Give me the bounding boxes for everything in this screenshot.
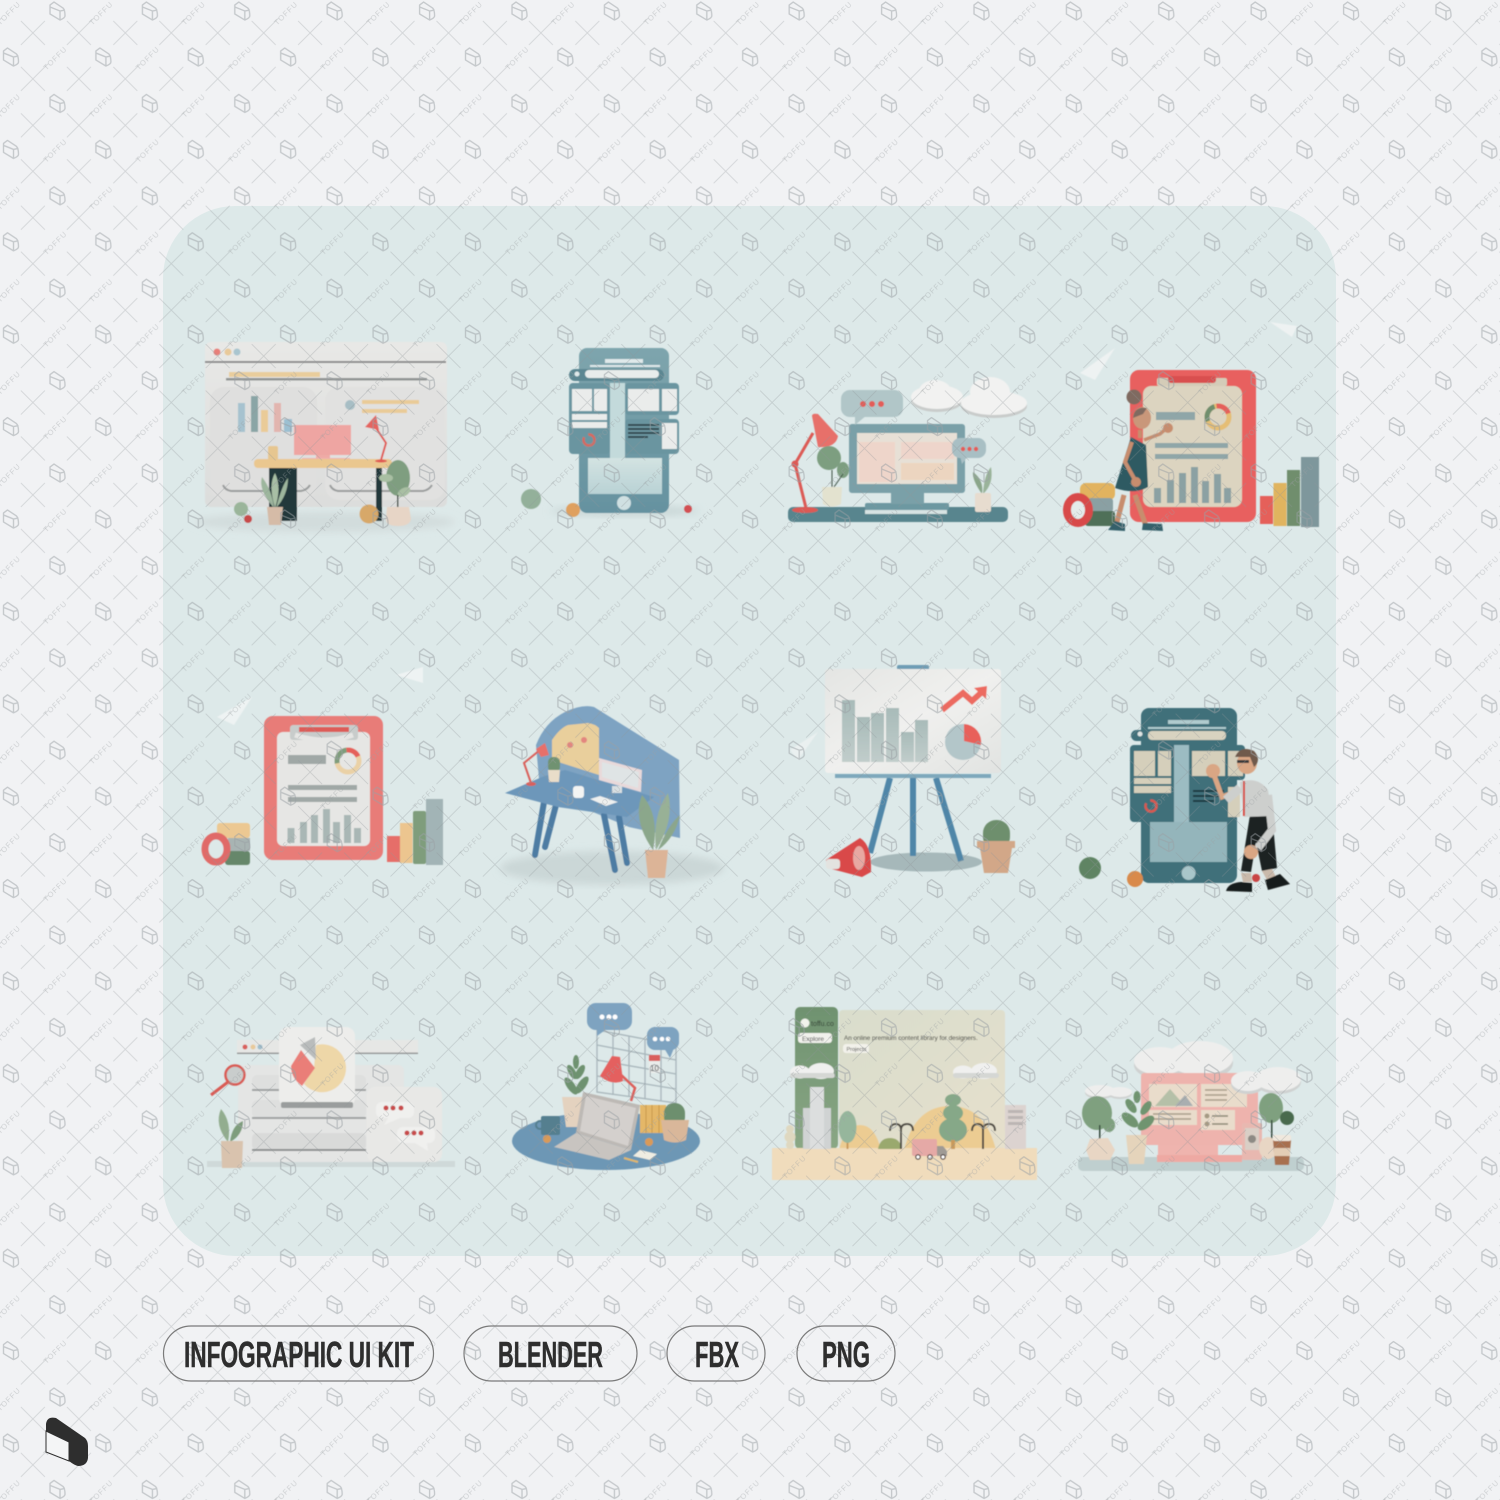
plant xyxy=(562,1055,591,1127)
paper plane xyxy=(396,667,423,683)
chat card xyxy=(367,1087,442,1162)
tag: FBX xyxy=(667,1326,765,1381)
cloud right xyxy=(1231,1067,1301,1094)
cactus xyxy=(977,820,1015,873)
pie chart xyxy=(945,724,981,760)
laptop xyxy=(554,1092,640,1160)
cloud left xyxy=(911,380,963,412)
spheres xyxy=(234,502,378,524)
bar chart xyxy=(842,700,928,762)
right cards xyxy=(625,383,679,454)
phone body xyxy=(1141,708,1237,883)
potted plant xyxy=(639,793,680,878)
monitor xyxy=(294,425,351,461)
easel legs xyxy=(870,778,961,861)
truck xyxy=(912,1139,947,1159)
pink monitor xyxy=(1141,1073,1258,1162)
monitor xyxy=(599,758,642,793)
explore button xyxy=(798,1033,832,1043)
monitor xyxy=(849,424,965,514)
street lamps xyxy=(890,1124,995,1149)
explore button: Explore xyxy=(802,1036,824,1043)
ground line xyxy=(207,1161,455,1167)
window dots xyxy=(242,1044,262,1050)
paper bar chart xyxy=(1154,467,1231,503)
partition xyxy=(536,706,680,838)
tag: INFOGRAPHIC UI KIT xyxy=(164,1326,434,1381)
illustration: presentation board xyxy=(790,665,1015,877)
cloud main xyxy=(1134,1041,1233,1080)
base plate xyxy=(1078,1157,1304,1171)
stacked shapes xyxy=(217,823,250,865)
search bar xyxy=(1131,730,1227,741)
paper plane xyxy=(217,697,252,725)
cactus xyxy=(661,1103,689,1142)
chat bubble two xyxy=(397,1127,435,1151)
tag: FBX: FBX xyxy=(695,1334,739,1375)
calendar: 10 xyxy=(650,1064,659,1073)
illustration: pink monitor with clouds xyxy=(1078,1041,1304,1171)
illustration: mobile wireframe with man xyxy=(1079,708,1290,892)
web page backdrop xyxy=(839,1010,1005,1150)
small left tree xyxy=(784,1125,796,1149)
chat bubble large xyxy=(587,1003,632,1036)
speech bubble large xyxy=(841,390,903,425)
tag: PNG xyxy=(797,1326,895,1381)
donut chart xyxy=(337,750,359,772)
hills xyxy=(839,1106,996,1150)
character: man xyxy=(1206,749,1290,892)
desk legs xyxy=(535,802,627,870)
desktop xyxy=(505,770,654,817)
lamp xyxy=(524,743,549,786)
window dots xyxy=(214,348,240,356)
pie chart xyxy=(291,1037,346,1092)
bar chart xyxy=(238,396,292,432)
cloud left xyxy=(1085,1085,1132,1099)
desk xyxy=(254,446,392,521)
rising arrow xyxy=(942,686,987,710)
tablet xyxy=(1242,1123,1262,1160)
illustration: round desk with laptop xyxy=(512,1003,700,1170)
lamp xyxy=(600,1056,635,1101)
paper bar chart xyxy=(288,809,361,843)
headline text: An online premium content library for designers. xyxy=(844,1035,978,1042)
illustration: clipboard with column chart xyxy=(205,667,443,865)
projects button: Projects xyxy=(846,1047,867,1053)
mug xyxy=(536,1116,560,1135)
clipboard xyxy=(264,716,383,860)
potted plant xyxy=(219,1109,243,1168)
megaphone xyxy=(826,838,871,877)
cloud right xyxy=(953,1063,999,1079)
clipboard xyxy=(1130,370,1256,522)
wire grid xyxy=(597,1030,676,1103)
stacked tree xyxy=(939,1094,967,1149)
crate xyxy=(640,1105,666,1133)
desk lamp xyxy=(792,414,838,513)
calendar xyxy=(649,1055,660,1073)
paper plane xyxy=(790,732,818,760)
column chart xyxy=(387,799,443,865)
small plant xyxy=(973,467,992,512)
speech bubble small xyxy=(952,438,986,464)
ground xyxy=(772,1148,1037,1180)
plant xyxy=(817,446,849,506)
search bar xyxy=(569,369,664,381)
keyboard and mug xyxy=(573,786,618,806)
tag: BLENDER xyxy=(464,1326,637,1381)
pie card xyxy=(279,1027,355,1108)
tag: INFOGRAPHIC UI KIT: INFOGRAPHIC UI KIT xyxy=(184,1334,414,1375)
panel: illustrations backdrop xyxy=(163,206,1336,1256)
column chart xyxy=(1260,457,1319,527)
ring xyxy=(1067,497,1089,523)
tall plant xyxy=(379,460,412,526)
logo text: toffu.co xyxy=(811,1021,834,1028)
illustration: website landscape xyxy=(772,1007,1037,1180)
tag: PNG: PNG xyxy=(822,1334,870,1375)
board xyxy=(825,665,1001,778)
spheres xyxy=(521,489,692,517)
small plant xyxy=(261,473,288,525)
base shadow xyxy=(870,852,982,872)
illustration: report with pie chart xyxy=(207,1027,455,1168)
text bars xyxy=(288,755,357,802)
illustration: clipboard with woman xyxy=(1067,322,1319,531)
illustration: mobile wireframe xyxy=(521,348,700,517)
cork board xyxy=(552,723,599,775)
plant left xyxy=(1082,1096,1115,1160)
chat bubble small xyxy=(647,1027,679,1058)
illustration: desktop with lamp and clouds xyxy=(788,377,1027,522)
plant right xyxy=(1259,1093,1294,1159)
coffee cup xyxy=(1273,1135,1291,1165)
illustration: office desk in window xyxy=(195,342,455,532)
phone body xyxy=(579,348,669,513)
logo text xyxy=(800,1018,834,1028)
left card xyxy=(569,383,610,454)
cloud right xyxy=(961,377,1027,418)
stacked shapes xyxy=(1080,483,1115,526)
window panel xyxy=(205,342,447,507)
text bars xyxy=(1155,412,1228,459)
round platform xyxy=(512,1112,700,1170)
floor shadow xyxy=(500,851,724,885)
magnifier xyxy=(211,1066,244,1095)
report window xyxy=(237,1040,418,1162)
donut chart xyxy=(1207,406,1229,428)
cactus xyxy=(548,757,560,782)
spheres xyxy=(1079,857,1260,887)
text bars xyxy=(345,400,419,413)
ring xyxy=(205,836,227,862)
green sidebar xyxy=(795,1007,838,1149)
tag: BLENDER: BLENDER xyxy=(498,1334,603,1375)
cloud left xyxy=(790,1063,835,1079)
projects button xyxy=(843,1044,869,1053)
left card xyxy=(1130,745,1174,822)
paper plane xyxy=(1080,348,1115,380)
character: woman xyxy=(1108,390,1173,531)
desk plate xyxy=(788,507,1008,522)
desk items xyxy=(543,1135,657,1162)
paper plane top right xyxy=(1270,322,1297,337)
illustration: isometric blue desk xyxy=(500,706,724,885)
right cards xyxy=(1189,745,1245,822)
chat bubble one xyxy=(376,1102,414,1125)
tree xyxy=(838,1111,856,1149)
desk lamp xyxy=(365,415,387,462)
icon: toffu cube logo xyxy=(46,1418,88,1466)
buildings xyxy=(803,1087,1026,1149)
bush xyxy=(878,1138,902,1149)
plant middle xyxy=(1119,1091,1157,1164)
